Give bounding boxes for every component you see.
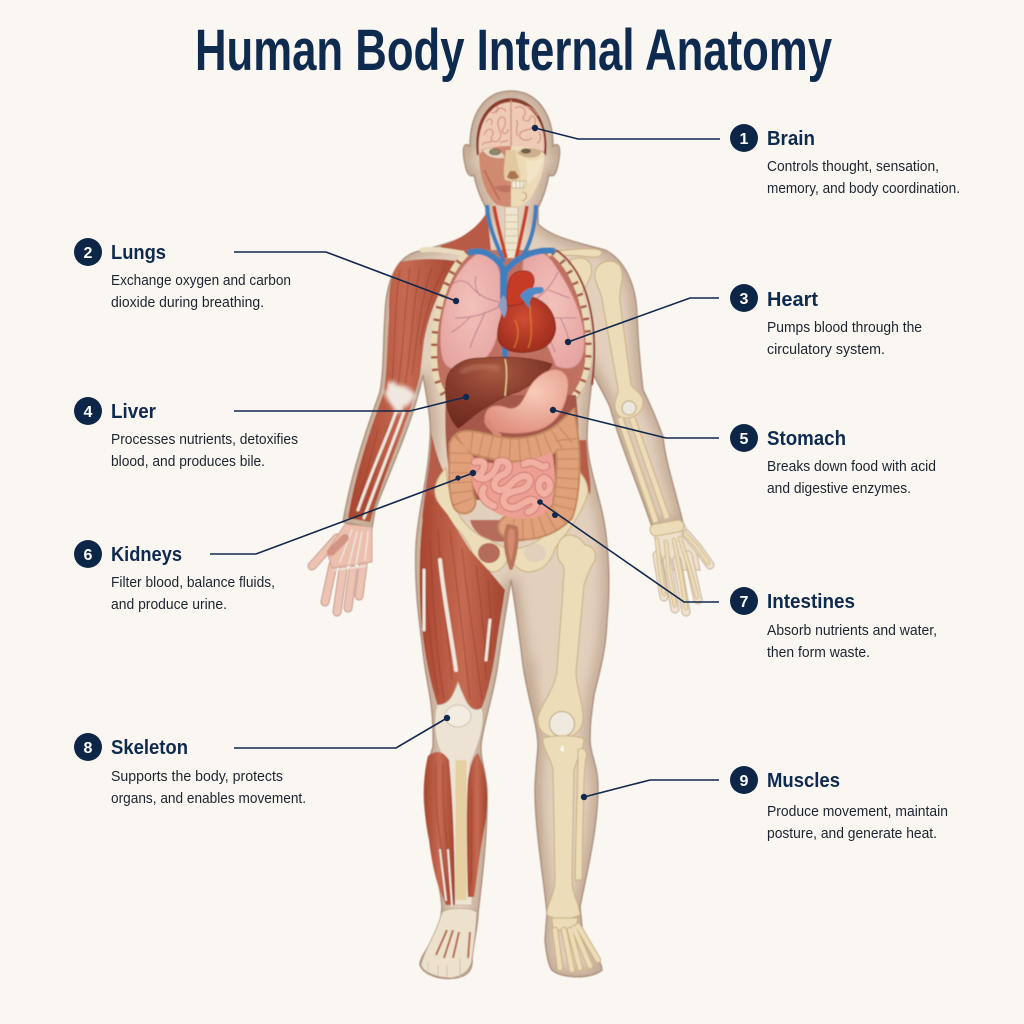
label: 5 Stomach: 5 bbox=[740, 431, 749, 448]
label: 1 Brain: memory, and body coordination. bbox=[767, 180, 960, 197]
neck vessels and trachea bbox=[487, 205, 536, 262]
callout leader lines bbox=[210, 125, 720, 800]
anatomy figure bbox=[312, 91, 710, 978]
head bbox=[476, 98, 547, 208]
label: 8 Skeleton: organs, and enables movement. bbox=[111, 790, 306, 807]
title: Human Body Internal Anatomy bbox=[195, 18, 832, 83]
face details bbox=[482, 148, 544, 201]
brain bbox=[476, 98, 547, 156]
label: 4 Liver: Processes nutrients, detoxifies bbox=[111, 431, 298, 448]
label: 1 Brain: Controls thought, sensation, bbox=[767, 158, 939, 175]
right tibia and fibula bbox=[543, 736, 586, 919]
left thigh muscles bbox=[420, 490, 505, 713]
label: 8 Skeleton: Supports the body, protects bbox=[111, 768, 283, 785]
label: 7 Intestines: then form waste. bbox=[767, 644, 870, 661]
small intestine bbox=[471, 452, 555, 519]
label: 5 Stomach: and digestive enzymes. bbox=[767, 480, 911, 497]
body silhouette bbox=[343, 91, 710, 978]
chest cavity bbox=[433, 250, 590, 405]
label: 6 Kidneys bbox=[74, 540, 275, 613]
label: 6 Kidneys: Kidneys bbox=[111, 544, 182, 566]
label: 9 Muscles: Produce movement, maintain bbox=[767, 803, 948, 820]
left hand muscles and fingers bbox=[312, 524, 372, 612]
large intestine bbox=[461, 432, 568, 568]
label: 1 Brain: Brain bbox=[767, 128, 815, 150]
label: 6 Kidneys: Filter blood, balance fluids, bbox=[111, 574, 275, 591]
lungs bbox=[440, 252, 584, 369]
label: 7 Intestines bbox=[730, 587, 937, 661]
left lower leg muscles bbox=[424, 752, 487, 905]
label: 7 Intestines: Intestines bbox=[767, 591, 855, 613]
label: 9 Muscles bbox=[730, 766, 948, 842]
label: 3 Heart: 3 bbox=[740, 291, 749, 308]
right arm bones bbox=[595, 261, 667, 522]
label: 6 Kidneys: and produce urine. bbox=[111, 596, 227, 613]
label: 6 Kidneys: 6 bbox=[84, 547, 93, 564]
face muscle half bbox=[479, 146, 511, 208]
clavicle and scapula bbox=[422, 249, 602, 293]
label: 2 Lungs: 2 bbox=[84, 245, 93, 262]
label: 3 Heart: Pumps blood through the bbox=[767, 319, 922, 336]
left arm muscles bbox=[348, 259, 462, 522]
label: 7 Intestines: 7 bbox=[740, 594, 749, 611]
great vessels bbox=[468, 250, 555, 360]
side abdominal muscles bbox=[422, 432, 591, 520]
label: 1 Brain bbox=[730, 124, 960, 197]
label: 9 Muscles: posture, and generate heat. bbox=[767, 825, 937, 842]
rib cage bbox=[434, 250, 594, 402]
right hand bones bbox=[656, 526, 708, 608]
label: 4 Liver bbox=[74, 397, 298, 470]
label: 9 Muscles: 9 bbox=[740, 773, 749, 790]
label: 2 Lungs: Lungs bbox=[111, 242, 166, 264]
label: 2 Lungs bbox=[74, 238, 291, 311]
label: 7 Intestines: Absorb nutrients and water, bbox=[767, 622, 937, 639]
label: 8 Skeleton: Skeleton bbox=[111, 737, 188, 759]
pelvis bbox=[435, 468, 588, 572]
label: 4 Liver: blood, and produces bile. bbox=[111, 453, 265, 470]
label: 4 Liver: Liver bbox=[111, 401, 156, 423]
label: 5 Stomach bbox=[730, 424, 936, 497]
label: 3 Heart bbox=[730, 284, 922, 358]
right femur bbox=[538, 535, 595, 738]
label: 9 Muscles: Muscles bbox=[767, 770, 840, 792]
left foot bbox=[421, 908, 477, 978]
label: 3 Heart: Heart bbox=[767, 289, 818, 311]
stomach bbox=[485, 370, 568, 437]
label: 8 Skeleton: 8 bbox=[84, 740, 93, 757]
skull half bbox=[511, 146, 544, 208]
abdomen cavity bbox=[445, 395, 578, 500]
label: 4 Liver: 4 bbox=[84, 404, 93, 421]
label: 5 Stomach: Breaks down food with acid bbox=[767, 458, 936, 475]
left knee and shin bbox=[435, 682, 483, 905]
trapezius muscle bbox=[440, 212, 491, 252]
liver bbox=[446, 357, 552, 428]
heart bbox=[498, 271, 556, 352]
label: 2 Lungs: Exchange oxygen and carbon bbox=[111, 272, 291, 289]
label: 2 Lungs: dioxide during breathing. bbox=[111, 294, 264, 311]
right foot bones bbox=[552, 918, 598, 970]
label: 5 Stomach: Stomach bbox=[767, 428, 846, 450]
label: 1 Brain: 1 bbox=[740, 131, 749, 148]
label: 3 Heart: circulatory system. bbox=[767, 341, 885, 358]
label: 8 Skeleton bbox=[74, 733, 306, 807]
